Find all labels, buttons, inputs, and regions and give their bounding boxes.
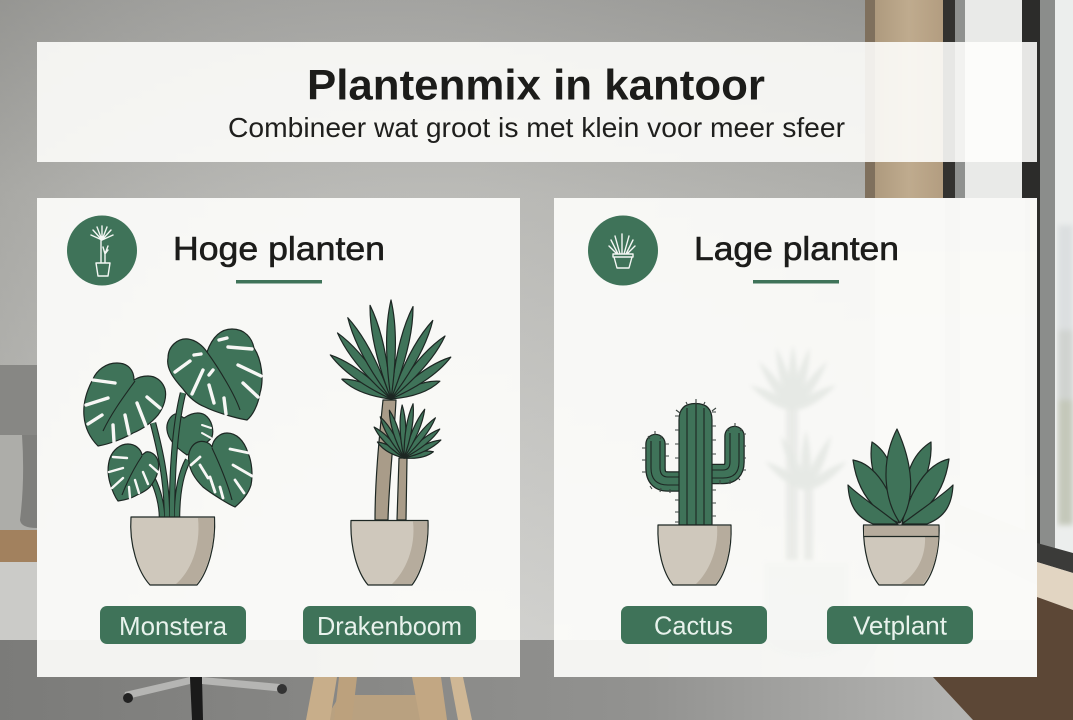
- plant: drakenboom: [328, 300, 453, 585]
- leaf: lower left: [108, 444, 159, 501]
- back leaf: [167, 413, 213, 455]
- label: monstera: Monstera: [119, 611, 228, 641]
- heading: lage planten: Lage planten: [694, 230, 899, 267]
- label: drakenboom: Drakenboom: [317, 611, 462, 641]
- pot: [131, 517, 215, 585]
- label: cactus: Cactus: [654, 610, 733, 640]
- heading underline: [753, 280, 839, 284]
- leaf: top right: [168, 329, 262, 420]
- pot: [351, 520, 428, 585]
- subtitle: Combineer wat groot is met klein voor meer sfeer: [228, 112, 845, 143]
- background ghost plant: [747, 345, 850, 658]
- icon: tall plant badge: [67, 216, 137, 286]
- label: vetplant: [827, 606, 973, 644]
- label: drakenboom: [303, 606, 476, 644]
- panel: lage planten: [554, 198, 1037, 677]
- icon: low plant badge: [588, 216, 658, 286]
- stems: [153, 393, 188, 518]
- panel: title banner: [37, 42, 1037, 162]
- heading: hoge planten: Hoge planten: [173, 230, 385, 267]
- leaf: top left: [84, 363, 166, 446]
- label: cactus: [621, 606, 767, 644]
- leaf: lower right: [189, 433, 252, 507]
- label: monstera: [100, 606, 246, 644]
- pot: [658, 525, 731, 585]
- plant: monstera: [84, 329, 262, 585]
- plant: vetplant: [848, 429, 953, 585]
- label: vetplant: Vetplant: [853, 610, 948, 640]
- pot: [863, 525, 939, 585]
- heading underline: [236, 280, 322, 284]
- panel: hoge planten: [37, 198, 520, 677]
- title: Plantenmix in kantoor: [307, 62, 765, 110]
- plant: cactus: [642, 399, 746, 585]
